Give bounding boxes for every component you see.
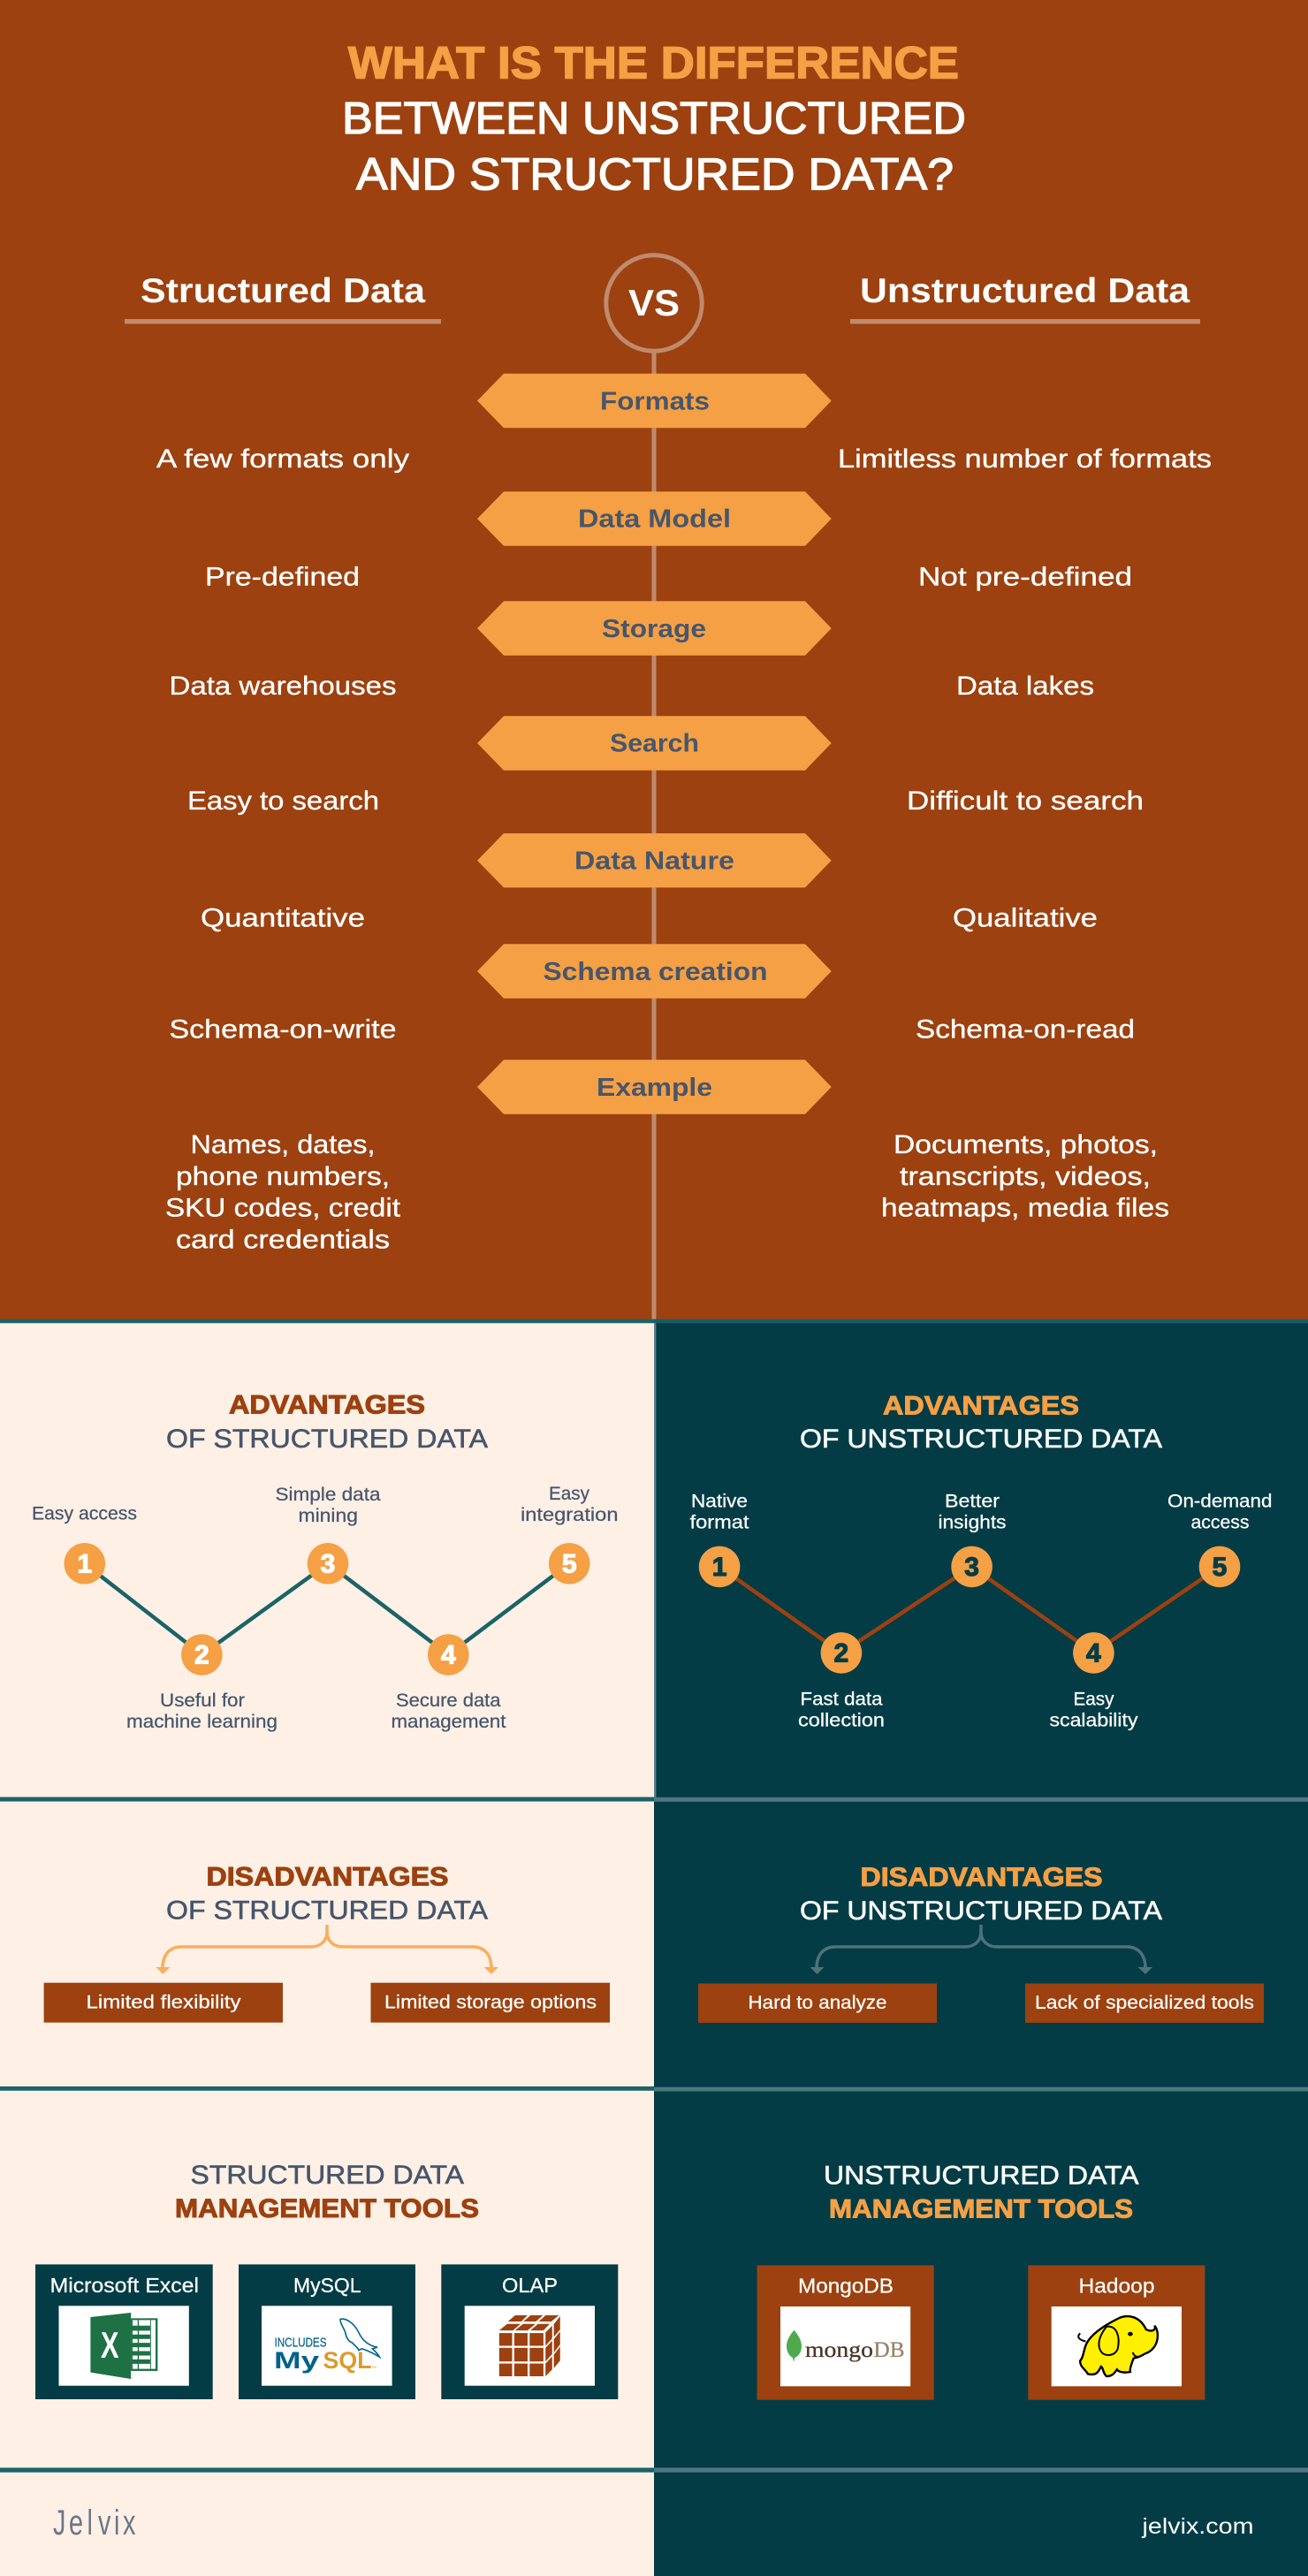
category: Data Model	[477, 491, 832, 546]
icon: Excel logo	[90, 2313, 157, 2379]
category: Schema creation	[477, 944, 832, 999]
step 5: On-demand	[1167, 1492, 1273, 1512]
separators	[0, 1319, 1308, 2473]
step 5: Easy	[549, 1484, 589, 1504]
panel: advantages of structured data	[32, 1391, 619, 1732]
heading: OF STRUCTURED DATA	[166, 1425, 488, 1454]
panel: cream column background	[0, 1319, 654, 2576]
tool card: MySQL	[239, 2264, 415, 2399]
left value: example	[165, 1130, 401, 1255]
panel: comparison	[0, 0, 1308, 1319]
heading: ADVANTAGES	[883, 1391, 1079, 1420]
category: Search	[477, 716, 832, 771]
heading: DISADVANTAGES	[207, 1862, 449, 1891]
box: limited storage options: Limited storage options	[384, 1992, 597, 2012]
heading: structured data	[125, 272, 441, 323]
icon: OLAP cube	[499, 2315, 560, 2376]
step 4	[1050, 1632, 1138, 1731]
heading: UNSTRUCTURED DATA	[824, 2162, 1138, 2191]
tool card: Microsoft Excel	[35, 2264, 213, 2399]
left value: example: phone numbers,	[176, 1162, 390, 1191]
arrow: split bracket	[810, 1925, 1152, 1974]
box: lack of specialized tools: Lack of specialized tools	[1035, 1993, 1254, 2013]
heading: OF UNSTRUCTURED DATA	[800, 1896, 1162, 1926]
title: BETWEEN UNSTRUCTURED	[342, 93, 966, 143]
left value: formats: A few formats only	[156, 445, 409, 474]
right value: data model: Not pre-defined	[918, 562, 1132, 591]
right value: search: Difficult to search	[907, 786, 1144, 816]
step 3	[939, 1492, 1006, 1587]
category: Example	[477, 1060, 832, 1114]
heading: structured data: Structured Data	[141, 272, 425, 310]
left value: search: Easy to search	[187, 786, 379, 816]
title: AND STRUCTURED DATA?	[356, 148, 954, 200]
tool card: Microsoft Excel: Microsoft Excel	[49, 2274, 199, 2297]
category: Storage	[477, 601, 832, 656]
tool card: Hadoop: Hadoop	[1078, 2275, 1154, 2298]
tool card: MongoDB	[757, 2265, 934, 2400]
icon: MySQL logo: INCLUDES	[274, 2335, 327, 2351]
icon: Excel logo: X	[101, 2324, 118, 2366]
icon: MongoDB logo	[787, 2330, 905, 2362]
VS badge	[606, 255, 702, 351]
step 4: Easy	[1073, 1690, 1114, 1710]
step 4: 4	[441, 1641, 456, 1670]
arrow: split bracket	[156, 1925, 498, 1974]
box: limited flexibility	[44, 1983, 283, 2023]
step 5: integration	[521, 1505, 619, 1525]
footer logo: Jelvix: Jelvix	[53, 2503, 136, 2542]
heading	[800, 1863, 1162, 1926]
step 2	[126, 1634, 278, 1732]
step 4: management	[391, 1712, 506, 1732]
panel: advantages of unstructured data	[689, 1391, 1273, 1731]
icon: MySQL logo	[274, 2319, 379, 2374]
category: Example: Example	[597, 1074, 712, 1102]
box: limited flexibility: Limited flexibility	[87, 1992, 241, 2012]
icon: MySQL logo: SQL	[323, 2347, 371, 2374]
zigzag connector	[719, 1567, 1220, 1653]
step 1: Native	[691, 1492, 748, 1512]
step 2: machine learning	[126, 1712, 278, 1732]
title	[342, 37, 966, 200]
step 3: 3	[321, 1550, 335, 1578]
icon: MongoDB logo: mongo	[805, 2338, 873, 2362]
right value: data nature: Qualitative	[953, 903, 1098, 932]
step 1: 1	[712, 1553, 726, 1582]
step 5	[1167, 1492, 1273, 1587]
column seam	[654, 1323, 656, 1797]
tool card: OLAP	[441, 2264, 618, 2399]
step 3	[276, 1485, 381, 1584]
step 5: 5	[1213, 1553, 1227, 1582]
panel: unstructured data management tools	[757, 2162, 1205, 2400]
category: Formats	[477, 374, 832, 428]
step 3: 3	[964, 1553, 979, 1582]
left value: example: card credentials	[176, 1226, 390, 1255]
title: WHAT IS THE DIFFERENCE	[348, 37, 959, 88]
step 1	[689, 1492, 749, 1587]
icon: Hadoop elephant	[1078, 2316, 1158, 2376]
right value: schema: Schema-on-read	[916, 1014, 1135, 1044]
panel: structured data management tools	[35, 2161, 618, 2399]
step 5: access	[1191, 1513, 1250, 1533]
heading	[166, 1391, 488, 1454]
left value: data model: Pre-defined	[205, 562, 360, 591]
center timeline line	[652, 352, 656, 1319]
icon: MySQL logo: My	[274, 2347, 319, 2374]
right value: example: Documents, photos,	[894, 1130, 1158, 1159]
tool card: MySQL: MySQL	[293, 2274, 361, 2297]
heading: unstructured data: Unstructured Data	[860, 272, 1190, 310]
step 1	[32, 1503, 137, 1584]
step 3: Better	[945, 1492, 1000, 1512]
left value: schema: Schema-on-write	[170, 1014, 396, 1044]
step 2: collection	[798, 1711, 885, 1731]
category: Schema creation: Schema creation	[543, 958, 767, 986]
icon: MySQL logo: TM	[371, 2365, 376, 2369]
right value: example: transcripts, videos,	[900, 1162, 1151, 1191]
heading	[175, 2161, 479, 2223]
step 3: insights	[939, 1513, 1006, 1533]
heading: MANAGEMENT TOOLS	[175, 2194, 479, 2223]
category: Data Nature: Data Nature	[574, 847, 734, 875]
category: Storage: Storage	[602, 615, 706, 643]
tool card: MongoDB: MongoDB	[798, 2275, 894, 2298]
step 2	[798, 1632, 885, 1731]
panel: disadvantages of structured data	[44, 1862, 610, 2023]
zigzag connector	[85, 1563, 569, 1654]
left value: example: Names, dates,	[191, 1130, 375, 1159]
step 4	[391, 1634, 506, 1732]
tool card: OLAP: OLAP	[502, 2274, 558, 2297]
VS badge: VS	[628, 282, 680, 323]
category: Search: Search	[610, 730, 699, 758]
footer url: jelvix.com	[1141, 2514, 1253, 2539]
step 5	[521, 1484, 619, 1584]
step 4: Secure data	[396, 1691, 501, 1711]
right value: example: heatmaps, media files	[881, 1194, 1169, 1223]
right value: formats: Limitless number of formats	[838, 445, 1212, 474]
heading: DISADVANTAGES	[861, 1863, 1103, 1892]
heading: ADVANTAGES	[229, 1391, 425, 1420]
step 2: Fast data	[801, 1690, 883, 1710]
step 1: 1	[77, 1550, 92, 1578]
heading: MANAGEMENT TOOLS	[829, 2195, 1133, 2223]
box: lack of specialized tools	[1025, 1983, 1264, 2023]
left value: data nature: Quantitative	[201, 903, 365, 932]
heading	[166, 1862, 488, 1925]
step 4: scalability	[1050, 1711, 1138, 1731]
heading: OF UNSTRUCTURED DATA	[800, 1425, 1162, 1454]
step 1: format	[689, 1513, 749, 1533]
right value: storage: Data lakes	[956, 672, 1094, 701]
box: hard to analyze	[698, 1983, 937, 2023]
panel: disadvantages of unstructured data	[698, 1863, 1264, 2023]
step 1: Easy access	[32, 1503, 137, 1524]
step 3: Simple data	[276, 1485, 381, 1505]
step 4: 4	[1086, 1639, 1101, 1668]
box: limited storage options	[371, 1983, 610, 2023]
step 2: 2	[834, 1639, 848, 1668]
step 2: Useful for	[160, 1691, 245, 1711]
heading: STRUCTURED DATA	[191, 2161, 464, 2190]
panel: dark column background	[654, 1319, 1308, 2576]
icon: MongoDB logo: DB	[873, 2338, 905, 2362]
left value: storage: Data warehouses	[170, 672, 396, 701]
step 3: mining	[299, 1506, 358, 1526]
left value: example: SKU codes, credit	[165, 1194, 401, 1223]
box: hard to analyze: Hard to analyze	[748, 1993, 887, 2013]
heading	[824, 2162, 1138, 2223]
heading: unstructured data	[850, 272, 1200, 323]
tool card: Hadoop	[1028, 2265, 1205, 2400]
right value: example	[881, 1130, 1169, 1223]
category: Data Model: Data Model	[578, 505, 731, 534]
category: Data Nature	[477, 833, 832, 887]
step 2: 2	[194, 1641, 209, 1670]
category: Formats: Formats	[600, 387, 710, 415]
heading	[800, 1391, 1162, 1454]
step 5: 5	[562, 1550, 577, 1578]
heading: OF STRUCTURED DATA	[166, 1896, 488, 1925]
